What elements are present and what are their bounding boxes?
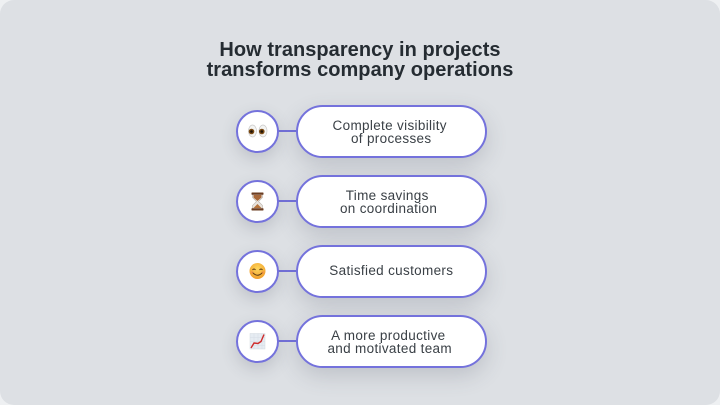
icon: hourglass xyxy=(236,180,278,222)
label: Satisfied customers xyxy=(329,262,453,278)
label: Complete visibility xyxy=(333,118,447,133)
label: A more productive xyxy=(331,328,446,343)
label: Time savings xyxy=(346,188,429,203)
title: How transparency in projects xyxy=(219,39,501,61)
icon: eyes xyxy=(236,110,278,152)
label xyxy=(296,314,487,368)
label xyxy=(296,244,487,298)
icon: smiling face xyxy=(236,250,278,292)
item: satisfied customers xyxy=(232,245,492,313)
connector xyxy=(277,340,297,342)
item: time savings xyxy=(232,175,492,243)
label: on coordination xyxy=(340,201,437,216)
connector xyxy=(277,200,297,202)
item: productive team xyxy=(232,315,492,383)
title: transforms company operations xyxy=(207,59,513,81)
connector xyxy=(277,270,297,272)
connector xyxy=(277,130,297,132)
icon: chart increasing xyxy=(236,320,278,362)
label: of processes xyxy=(351,131,431,146)
item: complete visibility xyxy=(232,105,492,173)
title xyxy=(206,39,513,81)
label: and motivated team xyxy=(327,341,452,356)
label xyxy=(296,104,487,158)
label xyxy=(296,174,487,228)
